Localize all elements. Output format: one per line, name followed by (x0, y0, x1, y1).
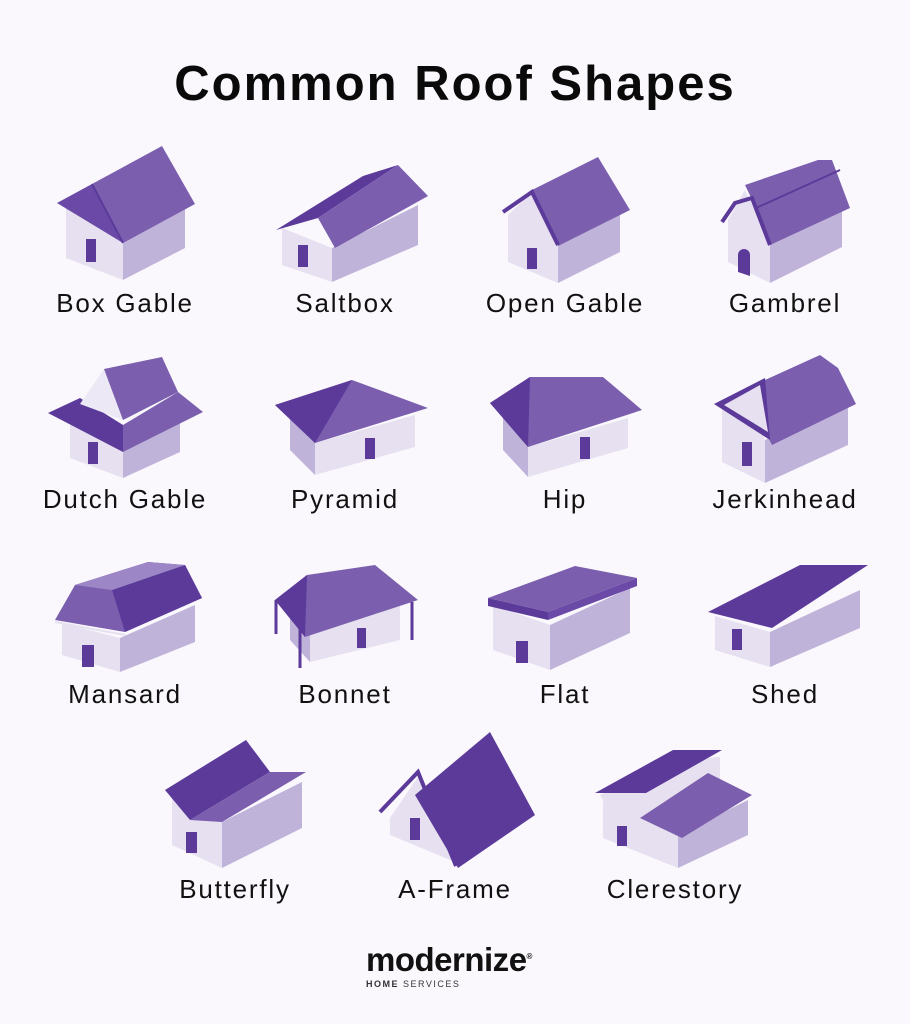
label: hip: Hip (543, 484, 587, 514)
logo: modernize® (366, 941, 532, 978)
icon: pyramid (275, 380, 428, 475)
icon: clerestory (595, 750, 752, 868)
label: saltbox: Saltbox (295, 288, 395, 318)
icon: open gable (503, 157, 630, 283)
icon: hip (490, 377, 642, 477)
label: a-frame: A-Frame (398, 874, 512, 904)
icon: jerkinhead (714, 355, 856, 483)
icon: bonnet (275, 565, 418, 668)
icon: box gable (57, 146, 195, 280)
icon: flat (488, 566, 637, 670)
icon: shed (708, 565, 868, 667)
label: butterfly: Butterfly (179, 874, 291, 904)
label: dutch gable: Dutch Gable (43, 484, 207, 514)
label: bonnet: Bonnet (298, 679, 392, 709)
icon: butterfly (165, 740, 306, 868)
label: gambrel: Gambrel (729, 288, 841, 318)
icon: saltbox (276, 165, 428, 282)
icon: mansard (55, 562, 202, 672)
label: box gable: Box Gable (56, 288, 194, 318)
label: pyramid: Pyramid (291, 484, 399, 514)
logo: HOME SERVICES (366, 979, 460, 989)
title: Common Roof Shapes (174, 57, 736, 111)
label: jerkinhead: Jerkinhead (712, 484, 858, 514)
label: mansard: Mansard (68, 679, 182, 709)
icon: gambrel (722, 160, 850, 283)
label: shed: Shed (751, 679, 819, 709)
label: clerestory: Clerestory (607, 874, 743, 904)
label: open gable: Open Gable (486, 288, 644, 318)
icon: dutch gable (48, 357, 203, 478)
icon: a-frame (380, 732, 535, 868)
label: flat: Flat (540, 679, 590, 709)
